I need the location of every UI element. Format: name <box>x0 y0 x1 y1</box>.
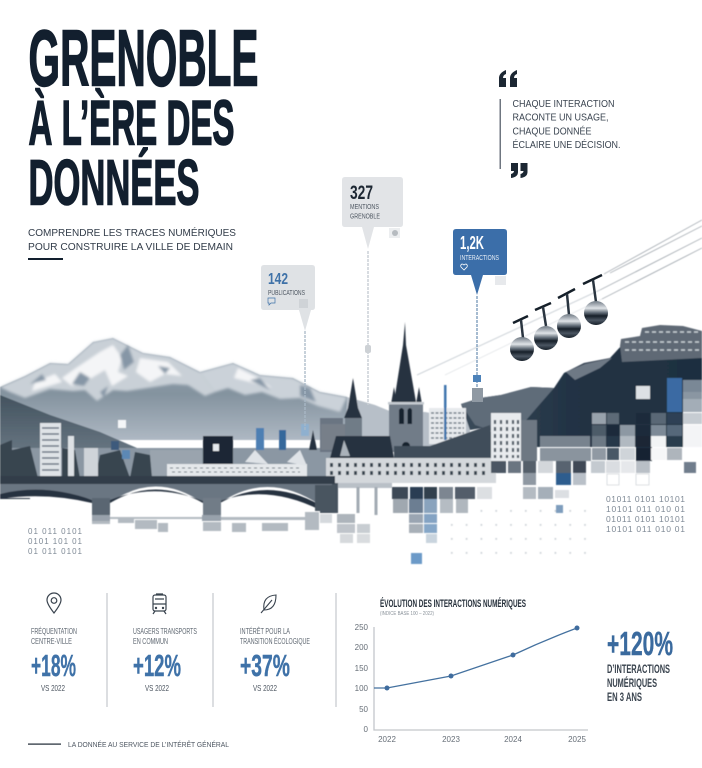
stat: fréquentation centre-ville <box>31 593 77 693</box>
cable car lines <box>417 220 702 375</box>
title: GRENOBLE <box>28 14 258 102</box>
binary text right: 10101 011 010 01 <box>606 524 685 534</box>
y axis labels: 150 <box>355 664 369 673</box>
y axis labels: 100 <box>355 684 369 693</box>
title: À L’ÈRE DES <box>28 88 234 158</box>
binary text right: 10101 011 010 01 <box>606 504 685 514</box>
cabin 2 <box>534 303 558 350</box>
callout: 327 mentions: 327 <box>350 183 373 204</box>
river reflections <box>92 512 319 532</box>
quote text <box>512 99 620 151</box>
stat: usagers transports: EN COMMUN <box>133 636 168 646</box>
callout: 1,2K interactions: 1,2K <box>460 233 484 253</box>
stat: intérêt transition écologique <box>240 595 310 693</box>
axes <box>374 627 588 730</box>
cabin 3 <box>557 289 581 338</box>
illustration: city scene <box>0 220 702 566</box>
y axis labels: 250 <box>355 623 369 632</box>
y axis labels: 200 <box>355 643 369 652</box>
bridge <box>0 476 335 521</box>
dividers <box>107 593 336 707</box>
mosaic of data pixels <box>320 378 702 564</box>
cable cars <box>510 275 608 361</box>
high-rise <box>429 385 466 444</box>
data points <box>384 626 580 690</box>
quote text: CHAQUE INTERACTION <box>512 99 614 110</box>
x axis labels: 2023 <box>442 735 460 744</box>
stat: intérêt transition écologique: TRANSITION ÉCOLOGIQUE <box>240 636 310 646</box>
chart title: ÉVOLUTION DES INTERACTIONS NUMÉRIQUES <box>380 597 526 610</box>
callout: 327 mentions: MENTIONS <box>350 202 379 211</box>
icon: opening quotation mark <box>499 70 517 87</box>
dotted pattern <box>440 510 590 566</box>
callout: 1,2K interactions <box>453 229 507 295</box>
stat: fréquentation centre-ville: +18% <box>31 648 76 683</box>
stat: fréquentation centre-ville: FRÉQUENTATION <box>31 626 77 636</box>
connector line: 142 <box>304 331 306 430</box>
x axis labels: 2024 <box>504 735 522 744</box>
stat: fréquentation centre-ville: VS 2022 <box>41 683 65 693</box>
castle <box>566 325 702 380</box>
callout: 327 mentions <box>342 177 403 249</box>
binary text left <box>28 527 83 556</box>
connector line: 327 <box>365 251 371 405</box>
subtitle <box>28 226 236 260</box>
x axis labels <box>378 735 586 744</box>
chart subtitle: (INDICE BASE 100 – 2022) <box>380 611 434 617</box>
quote text: CHAQUE DONNÉE <box>512 124 592 138</box>
distant mountains behind church <box>320 392 470 450</box>
binary text left: 0101 101 01 <box>28 537 83 546</box>
callout: 142 publications: PUBLICATIONS <box>268 290 305 297</box>
footer tagline: LA DONNÉE AU SERVICE DE L’INTÉRÊT GÉNÉRAL <box>68 740 229 749</box>
stat: usagers transports: USAGERS TRANSPORTS <box>133 626 197 636</box>
binary text right: 01011 0101 10101 <box>606 514 685 524</box>
binary text right: 01011 0101 10101 <box>606 494 685 504</box>
icon: location pin <box>47 593 61 613</box>
stat: usagers transports: VS 2022 <box>145 683 169 693</box>
stat: intérêt transition écologique: INTÉRÊT POUR LA <box>240 626 290 636</box>
y axis labels: 50 <box>359 705 369 714</box>
city skyline left <box>0 418 343 478</box>
y axis labels <box>355 623 369 734</box>
binary text right <box>606 494 685 534</box>
quote text: ÉCLAIRE UNE DÉCISION. <box>512 138 620 151</box>
chart: évolution des interactions <box>355 597 588 744</box>
binary text left: 01 011 0101 <box>28 547 83 556</box>
title <box>28 14 258 218</box>
key figure: +120% <box>607 625 673 704</box>
icon: closing quotation mark <box>511 163 528 178</box>
callout: 142 publications: 142 <box>268 271 288 288</box>
church and buildings <box>320 322 537 515</box>
title: DONNÉES <box>28 146 199 218</box>
stat: usagers transports <box>133 594 197 693</box>
quote text: RACONTE UN USAGE, <box>512 112 608 124</box>
right hill <box>461 345 702 461</box>
callout: 142 publications <box>261 265 315 331</box>
binary text left: 01 011 0101 <box>28 527 83 536</box>
icon: leaf <box>261 595 276 613</box>
left dark hill <box>0 395 170 480</box>
stat: intérêt transition écologique: +37% <box>240 648 290 683</box>
connector line: 1,2K <box>472 296 483 402</box>
cabin 4 <box>583 275 608 325</box>
data line <box>374 628 577 688</box>
icon: tram <box>153 594 166 614</box>
y axis labels: 0 <box>364 725 369 734</box>
subtitle: POUR CONSTRUIRE LA VILLE DE DEMAIN <box>28 241 233 253</box>
subtitle: COMPRENDRE LES TRACES NUMÉRIQUES <box>28 226 236 239</box>
x axis labels: 2022 <box>378 735 396 744</box>
stat: usagers transports: +12% <box>133 648 181 683</box>
callout: 327 mentions: GRENOBLE <box>350 212 380 220</box>
quote <box>499 70 620 178</box>
mountains <box>0 338 347 440</box>
cabin 1 <box>510 316 534 361</box>
callout: 1,2K interactions: INTERACTIONS <box>460 255 499 262</box>
key figure: +120%: EN 3 ANS <box>607 690 642 704</box>
stat: intérêt transition écologique: VS 2022 <box>253 683 277 693</box>
x axis labels: 2025 <box>568 735 586 744</box>
stat: fréquentation centre-ville: CENTRE-VILLE <box>31 636 72 646</box>
key figure: +120%: NUMÉRIQUES <box>607 675 657 690</box>
